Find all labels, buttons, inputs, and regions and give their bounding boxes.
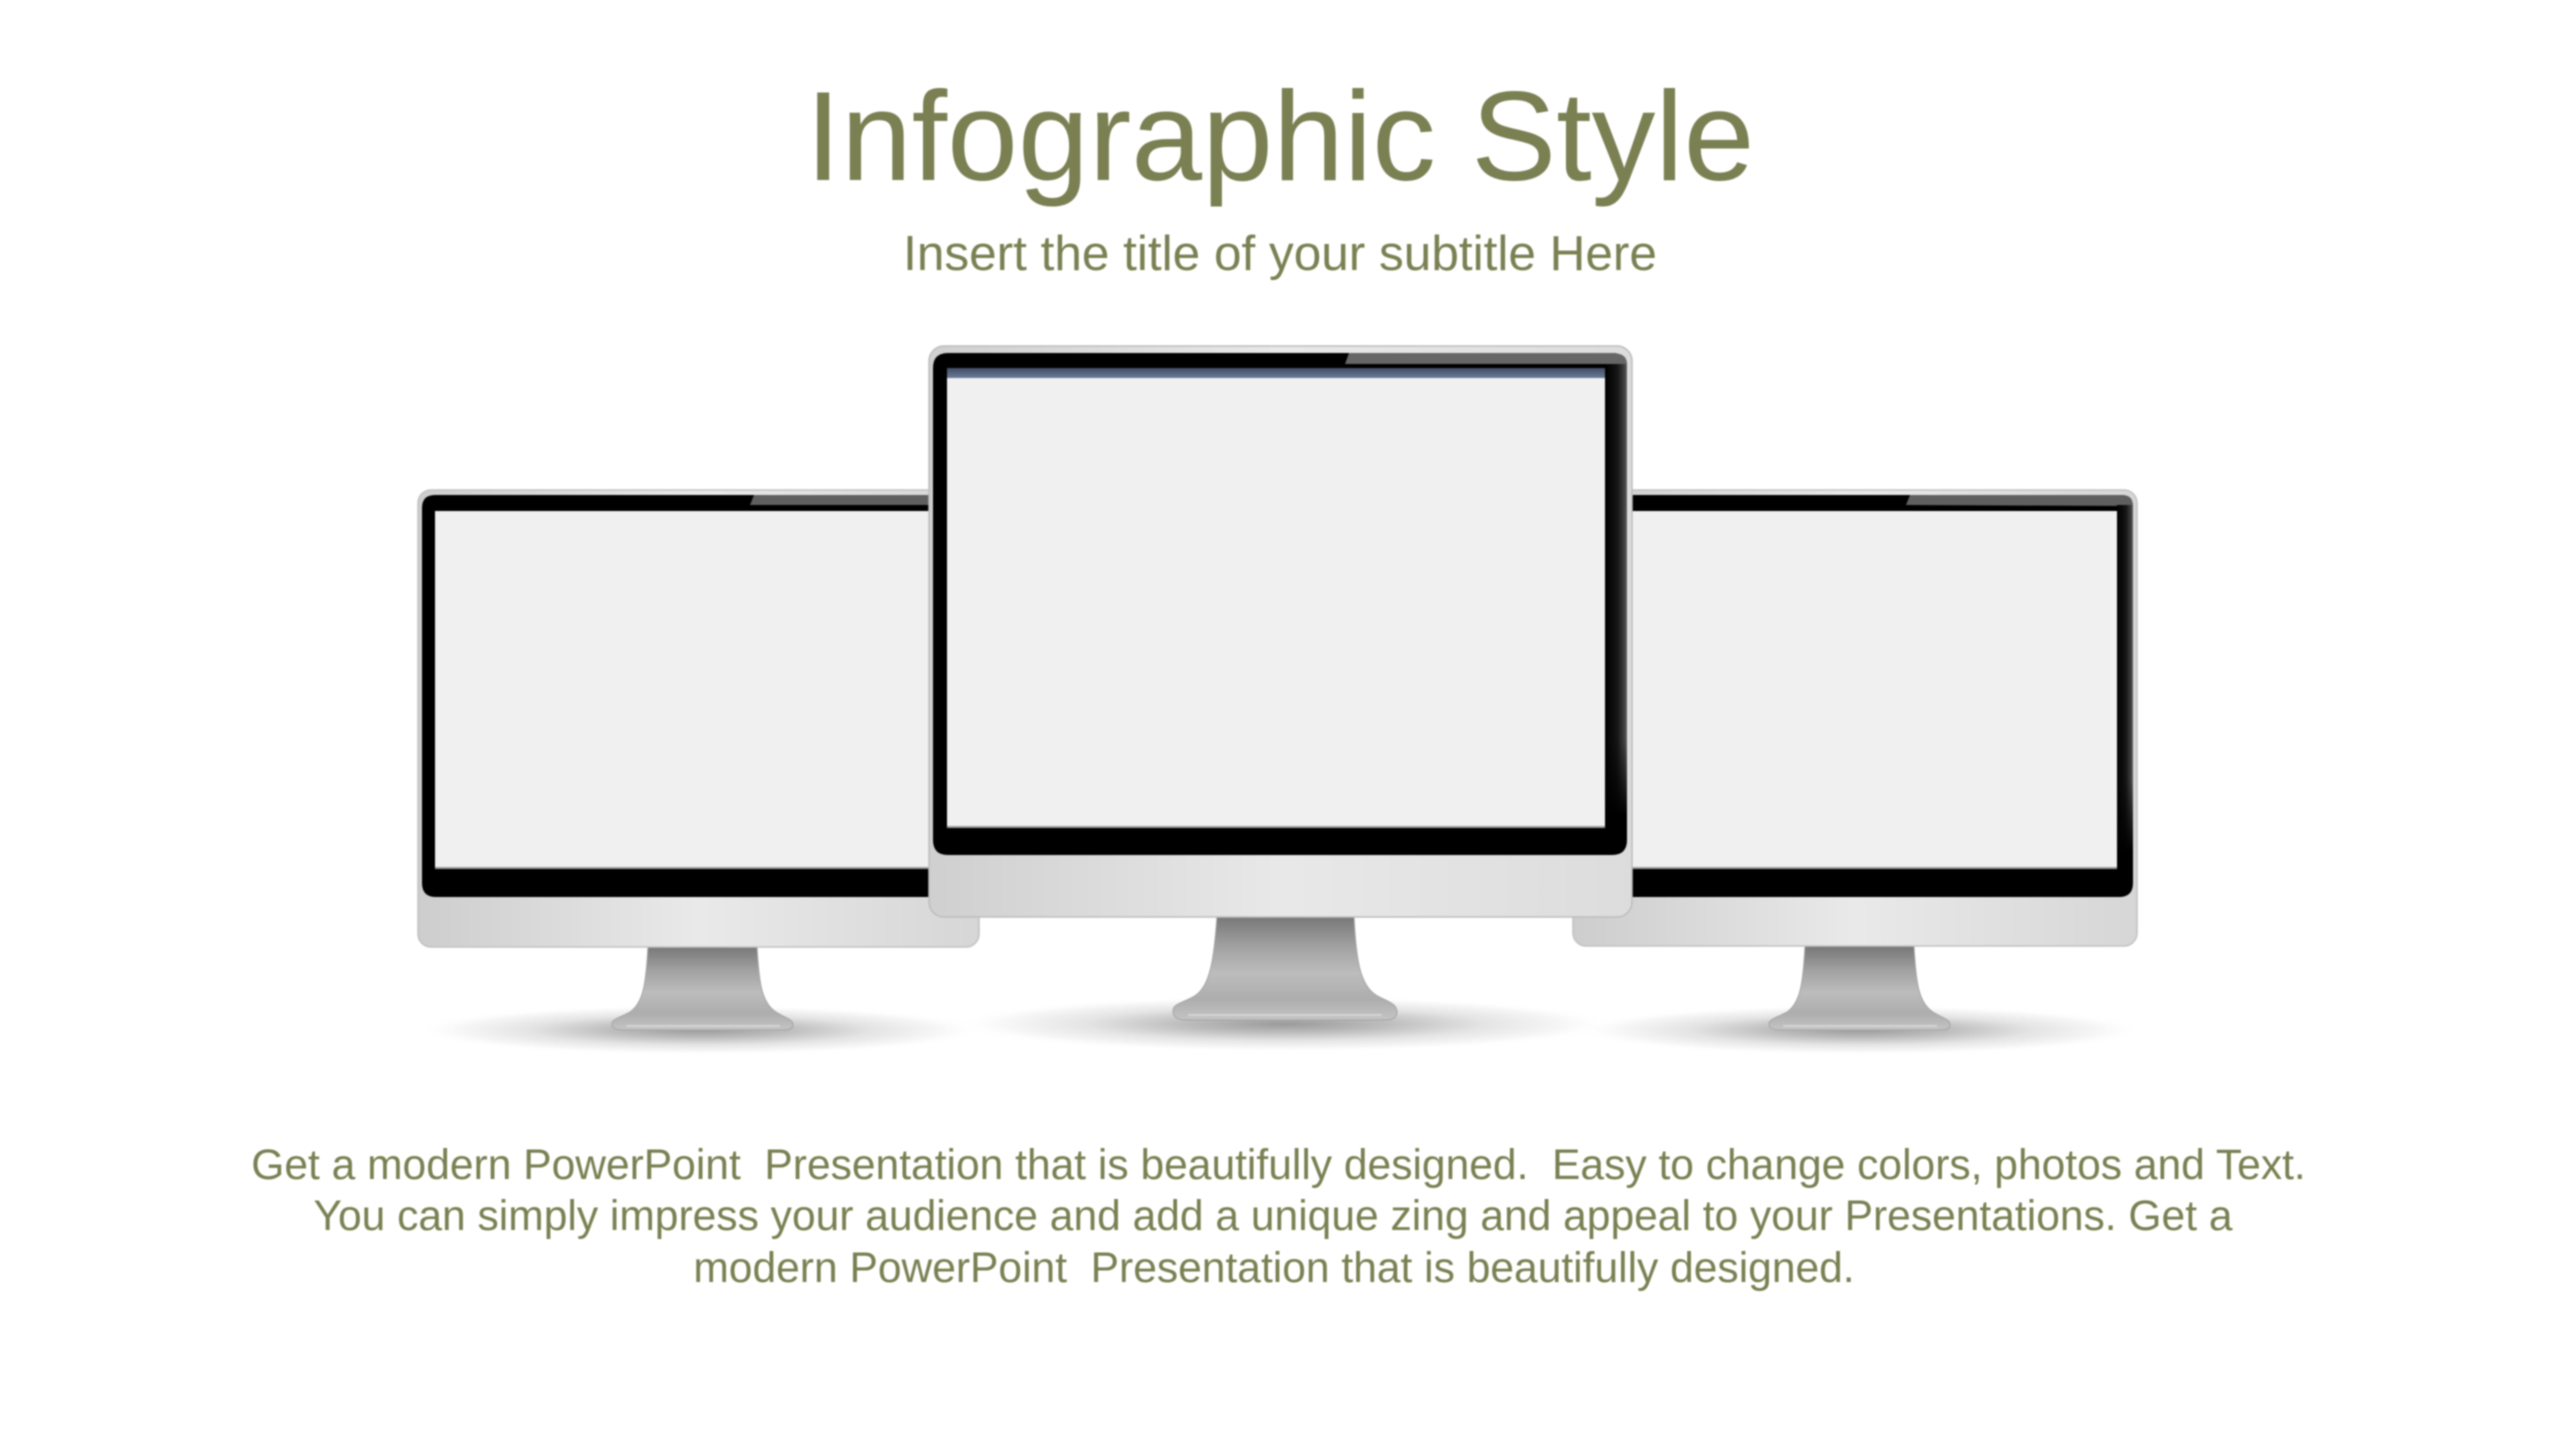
body text: modern PowerPoint Presentation that is beautifully designed. [693,1244,1855,1292]
center bezel [933,353,1627,855]
body text: You can simply impress your audience and add a unique zing and appeal to your Presentations. Get a [314,1192,2233,1240]
right side sheen [2117,505,2133,852]
monitor: left [418,490,979,1030]
right screen [1576,511,2117,869]
left bezel [422,495,975,897]
center side sheen [1605,364,1627,816]
body text: Get a modern PowerPoint Presentation that is beautifully designed. Easy to change colors, photos and Text. [251,1141,2306,1189]
center screen top band [947,368,1605,378]
center stand [1173,916,1397,1020]
monitor: right [1573,490,2137,1030]
center screen [947,378,1605,828]
right bezel [1576,495,2133,897]
left highlight [750,495,975,505]
right body [1573,490,2137,946]
title: Infographic Style [806,65,1754,207]
body text [251,1141,2306,1292]
monitor: center [929,346,1632,1020]
right stand [1769,946,1950,1030]
center body [929,346,1632,917]
left body [418,490,979,947]
left stand [612,946,793,1030]
right highlight [1906,495,2133,506]
left screen [435,511,975,869]
subtitle: Insert the title of your subtitle Here [903,226,1657,281]
shadows under monitors [415,996,2145,1055]
center highlight [1345,353,1627,364]
